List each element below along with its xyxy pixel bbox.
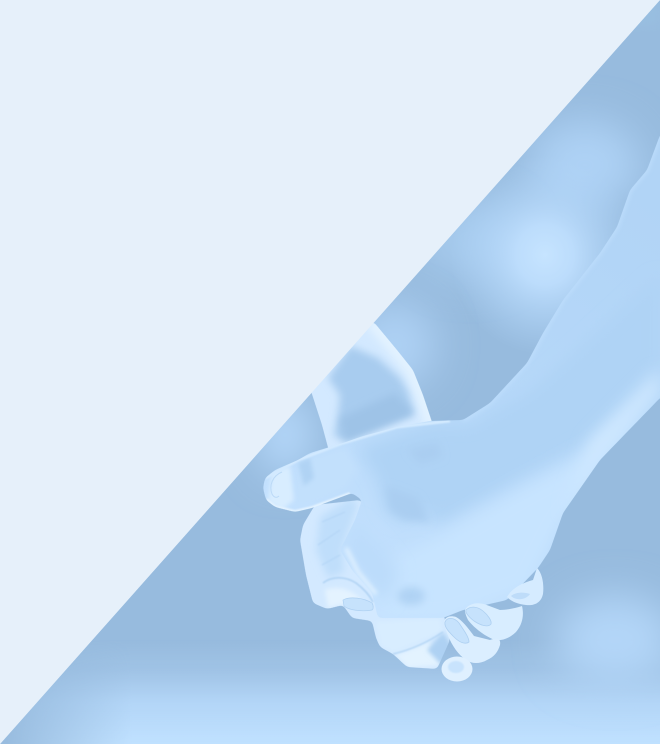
lit rim along the hand (265, 421, 450, 478)
second finger (465, 603, 523, 640)
knuckle texture patch (397, 587, 425, 605)
back-of-hand shadow (366, 425, 540, 520)
first finger (444, 616, 500, 663)
wrist shadow patch (328, 346, 414, 441)
front hand and forearm (250, 120, 660, 630)
thumb shading (298, 446, 358, 505)
third finger (507, 568, 543, 605)
upper forearm rim (463, 135, 660, 420)
finger shadow at lower left (346, 548, 376, 594)
right edge glow on forearm (586, 376, 660, 456)
bright lower hand (433, 457, 588, 590)
rear hand: wrist, palm and lower fingers (300, 323, 450, 669)
photo: two clasped hands (250, 120, 660, 682)
palm shadow (316, 497, 358, 578)
webbing shadow between fingers (426, 632, 449, 664)
rear thumbnail (343, 598, 373, 611)
wrist edge highlight (373, 321, 433, 425)
front hand: interlocked fingers (442, 568, 543, 682)
fingertip at the bottom (442, 656, 472, 682)
rear finger crease (323, 578, 373, 602)
thumbnail (271, 472, 282, 497)
lower finger (376, 618, 443, 653)
